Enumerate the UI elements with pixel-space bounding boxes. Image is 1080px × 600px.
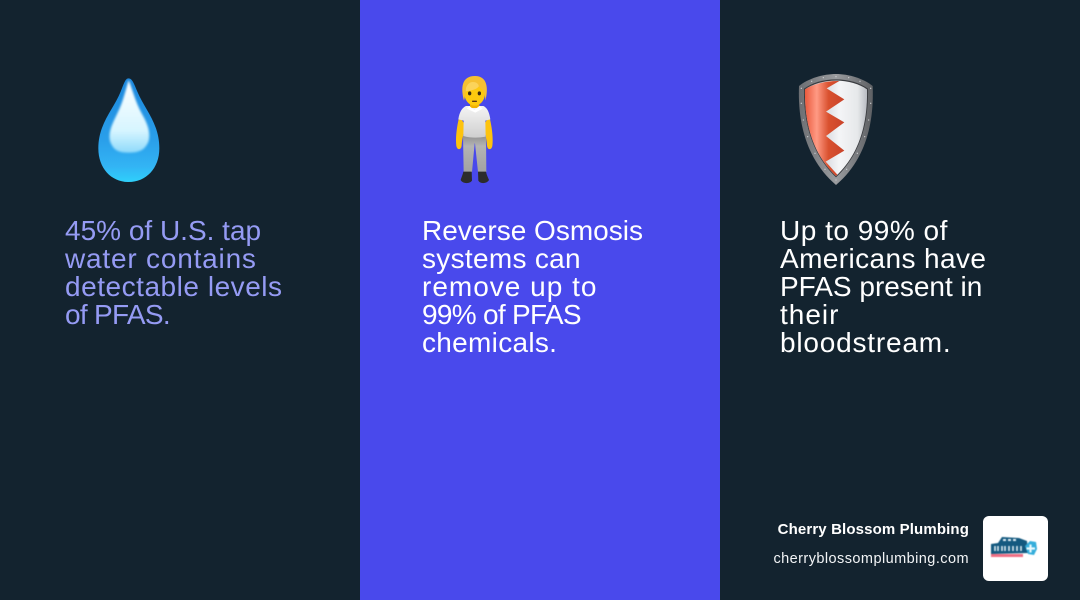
brand name: Cherry Blossom Plumbing bbox=[778, 521, 969, 538]
text: bloodstream statistic: Americans have bbox=[780, 243, 986, 274]
text: reverse osmosis statistic: chemicals. bbox=[422, 327, 557, 358]
panel: center reverse osmosis fact bbox=[360, 0, 720, 600]
panel: left water fact bbox=[0, 0, 360, 600]
text: tap water statistic: of PFAS. bbox=[65, 299, 170, 330]
icon: shield bbox=[798, 74, 873, 185]
text: bloodstream statistic: PFAS present in bbox=[780, 271, 982, 302]
text: reverse osmosis statistic: systems can bbox=[422, 243, 581, 274]
panel: right bloodstream fact bbox=[720, 0, 1080, 600]
icon: standing person bbox=[456, 76, 493, 184]
brand url: cherryblossomplumbing.com bbox=[773, 551, 969, 567]
icon: water drop bbox=[98, 78, 160, 182]
logo tile bbox=[983, 516, 1048, 581]
text: tap water statistic: water contains bbox=[65, 243, 257, 274]
text: tap water statistic: 45% of U.S. tap bbox=[65, 215, 261, 246]
text: bloodstream statistic bbox=[780, 215, 986, 358]
text: bloodstream statistic: bloodstream. bbox=[780, 327, 951, 358]
logo mark bbox=[990, 536, 1038, 558]
brand block bbox=[773, 516, 1048, 581]
text: bloodstream statistic: Up to 99% of bbox=[780, 215, 948, 246]
text: tap water statistic bbox=[65, 215, 283, 330]
text: reverse osmosis statistic: 99% of PFAS bbox=[422, 299, 581, 330]
text: reverse osmosis statistic: remove up to bbox=[422, 271, 597, 302]
text: reverse osmosis statistic: Reverse Osmosis bbox=[422, 215, 643, 246]
text: reverse osmosis statistic bbox=[422, 215, 643, 358]
text: tap water statistic: detectable levels bbox=[65, 271, 283, 302]
text: bloodstream statistic: their bbox=[780, 299, 839, 330]
